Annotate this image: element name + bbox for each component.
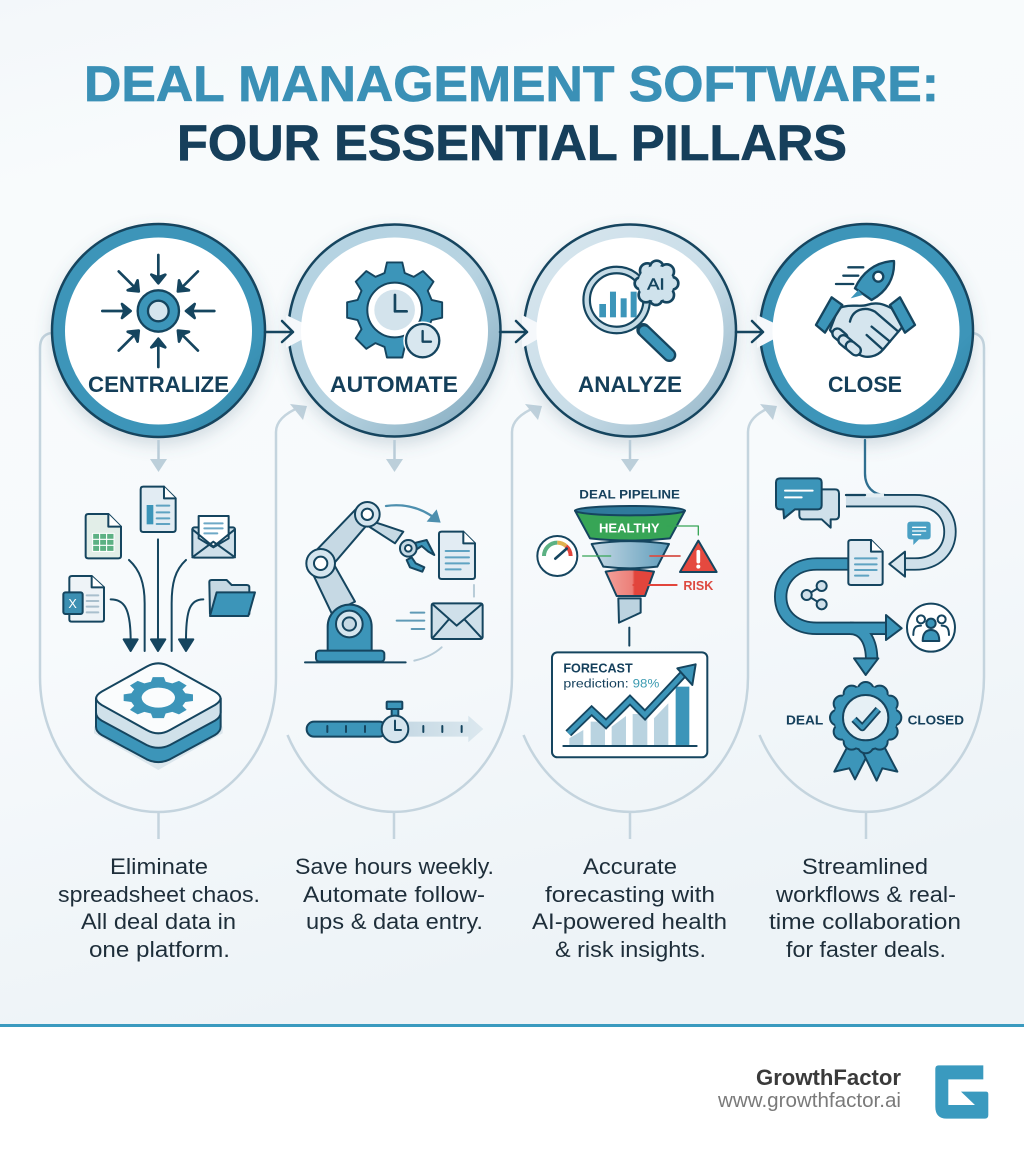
text block: analyze: AI-powered health (532, 909, 727, 934)
label: CLOSE (828, 372, 902, 397)
icon: deal closed badge (830, 682, 901, 781)
icon: magnifier with brain: AI (647, 276, 665, 293)
pillar circle: centralize (52, 224, 265, 437)
text block: analyze: & risk insights. (555, 937, 706, 962)
risk label: RISK (683, 579, 714, 593)
arrows into platform (111, 539, 203, 651)
icon: spreadsheet document (86, 514, 121, 558)
text block: automate (295, 854, 494, 934)
arrow: analyze to close (736, 321, 763, 342)
funnel (575, 487, 685, 623)
title: DEAL MANAGEMENT SOFTWARE: (84, 56, 939, 112)
funnel: HEALTHY (599, 521, 660, 535)
arrow: down from centralize (150, 440, 167, 472)
icon: chat bubbles (776, 478, 839, 528)
forecast chart: prediction: (563, 676, 629, 690)
pillar circle: close (757, 224, 973, 437)
footer (0, 1024, 1024, 1154)
text block: close: workflows & real- (775, 882, 956, 907)
closed label: CLOSED (908, 713, 964, 727)
decorative arcs (414, 585, 474, 661)
text block: automate: Save hours weekly. (295, 854, 494, 879)
icon: envelope with speed lines (397, 603, 483, 639)
deal label: DEAL (786, 713, 824, 727)
timeline with stopwatch (307, 702, 483, 742)
text block: analyze: Accurate (583, 854, 677, 879)
text block: close: time collaboration (769, 909, 961, 934)
text block: centralize (58, 854, 260, 962)
forecast chart: FORECAST (563, 662, 633, 676)
icon: excel file (63, 576, 104, 622)
label: AUTOMATE (330, 372, 458, 397)
icon: document (848, 540, 883, 585)
icon: team (907, 604, 955, 652)
arrow: automate to analyze (500, 321, 527, 342)
icon: excel file: X (68, 597, 77, 611)
text block: analyze: forecasting with (545, 882, 715, 907)
status connectors (583, 526, 698, 585)
connector (626, 628, 632, 646)
icon: robot arm (305, 502, 434, 662)
panel: close illustration (776, 440, 964, 781)
panel: analyze illustration (537, 487, 717, 757)
text block: close (769, 854, 961, 962)
pillar circle: analyze (522, 224, 736, 436)
arc arrow to document (386, 505, 441, 523)
logo (935, 1065, 988, 1119)
icon: small message (907, 522, 931, 545)
icon: gear with clocks (347, 262, 442, 360)
label: ANALYZE (578, 372, 682, 397)
title: FOUR ESSENTIAL PILLARS (177, 115, 847, 171)
text block: automate: ups & data entry. (306, 909, 483, 934)
icon: document (439, 532, 475, 579)
icon: warning triangle (680, 541, 717, 572)
connector rails between pillars (40, 333, 984, 839)
title (84, 56, 939, 171)
website: www.growthfactor.ai (717, 1089, 901, 1112)
icon: email envelope (192, 516, 235, 558)
icon: magnifier with brain (587, 261, 678, 355)
icon: rocket and handshake (816, 261, 915, 358)
arrow: centralize to automate (265, 321, 293, 342)
icon: share (802, 581, 827, 609)
panel: automate illustration (305, 502, 483, 742)
text block: centralize: All deal data in (81, 909, 236, 934)
text block: close: Streamlined (802, 854, 928, 879)
text block: centralize: spreadsheet chaos. (58, 882, 260, 907)
text block: analyze (532, 854, 727, 962)
icon: list document (141, 487, 176, 532)
text block: centralize: Eliminate (110, 854, 208, 879)
text block: close: for faster deals. (786, 937, 946, 962)
icon: folder (209, 580, 255, 616)
brand name: GrowthFactor (756, 1065, 901, 1090)
text block: automate: Automate follow- (303, 882, 485, 907)
pillar circle: automate (286, 224, 500, 436)
label: CENTRALIZE (88, 372, 229, 397)
text block: centralize: one platform. (89, 937, 230, 962)
icon: gauge (537, 536, 577, 576)
panel: centralize illustration (63, 487, 255, 770)
arrow: down from analyze (621, 440, 639, 472)
funnel: DEAL PIPELINE (579, 487, 680, 501)
forecast chart: 98% (633, 676, 660, 690)
workflow path (781, 440, 950, 675)
arrow: down from automate (386, 440, 403, 472)
icon: platform with gear (94, 663, 223, 770)
icon: arrows converging on hub (102, 255, 214, 367)
forecast chart (552, 652, 707, 757)
